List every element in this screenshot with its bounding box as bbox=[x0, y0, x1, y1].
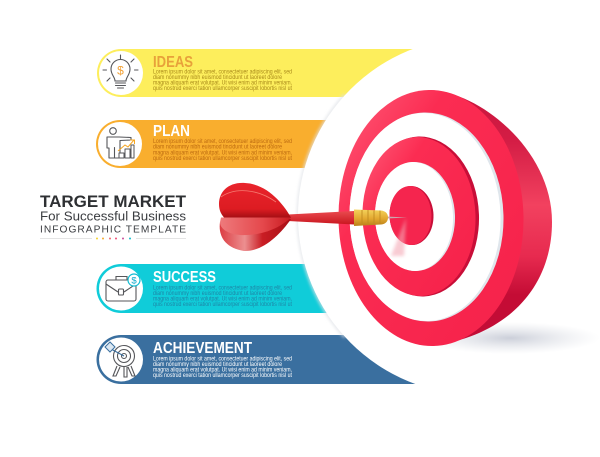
icon: briefcase: $ bbox=[131, 276, 137, 286]
barrel bbox=[354, 210, 388, 226]
icon: light bulb bbox=[99, 51, 143, 95]
plan text: diam nonummy nibh euismod tincidunt ut laoreet dolore bbox=[153, 145, 283, 151]
achievement text: quis nostrud exerci tation ullamcorper suscipit lobortis nisl ut bbox=[153, 373, 292, 379]
success text bbox=[153, 285, 292, 308]
panel: success bbox=[96, 264, 345, 313]
inner white ring bbox=[373, 161, 457, 272]
lower flight front bbox=[220, 218, 291, 235]
plan heading: PLAN bbox=[153, 123, 190, 140]
success band bbox=[96, 264, 345, 313]
title block bbox=[40, 192, 187, 240]
achievement heading: ACHIEVEMENT bbox=[153, 340, 252, 357]
ideas band bbox=[97, 49, 416, 97]
bullseye bbox=[388, 185, 435, 246]
outer white ring bbox=[347, 111, 506, 323]
success heading: SUCCESS bbox=[153, 269, 216, 286]
lower flight back bbox=[220, 219, 291, 251]
ideas text: quis nostrud exerci tation ullamcorper suscipit lobortis nisl ut bbox=[153, 86, 292, 92]
upper flight bbox=[219, 183, 291, 218]
plan text: Lorem ipsum dolor sit amet, consectetuer adipiscing elit, sed bbox=[153, 139, 292, 145]
tagline: INFOGRAPHIC TEMPLATE bbox=[40, 224, 186, 236]
needle bbox=[386, 216, 407, 218]
achievement text: diam nonummy nibh euismod tincidunt ut laoreet dolore bbox=[153, 362, 283, 368]
icon: briefcase bbox=[99, 266, 143, 310]
success text: Lorem ipsum dolor sit amet, consectetuer adipiscing elit, sed bbox=[153, 285, 292, 291]
ideas text: magna aliquam erat volutpat. Ut wisi enim ad minim veniam, bbox=[153, 80, 292, 86]
success text: magna aliquam erat volutpat. Ut wisi enim ad minim veniam, bbox=[153, 296, 292, 302]
colored dots bbox=[96, 238, 131, 240]
shaft bbox=[288, 211, 354, 224]
dart bbox=[219, 183, 407, 251]
white arc behind target bbox=[298, 37, 600, 395]
board face bbox=[336, 88, 526, 348]
achievement text bbox=[153, 356, 292, 379]
dart shadow on board bbox=[391, 218, 406, 256]
icon: target with arrow bbox=[99, 338, 143, 382]
achievement text: magna aliquam erat volutpat. Ut wisi enim ad minim veniam, bbox=[153, 367, 292, 373]
plan text: magna aliquam erat volutpat. Ut wisi enim ad minim veniam, bbox=[153, 150, 292, 156]
panel: ideas bbox=[97, 49, 416, 97]
middle red ring bbox=[360, 135, 482, 298]
title: TARGET MARKET bbox=[40, 192, 187, 211]
success text: diam nonummy nibh euismod tincidunt ut laoreet dolore bbox=[153, 291, 283, 297]
subtitle: For Successful Business bbox=[40, 210, 186, 224]
plan band bbox=[96, 120, 345, 168]
panel: plan bbox=[96, 120, 345, 168]
ideas text: Lorem ipsum dolor sit amet, consectetuer adipiscing elit, sed bbox=[153, 70, 292, 76]
achievement text: Lorem ipsum dolor sit amet, consectetuer adipiscing elit, sed bbox=[153, 356, 292, 362]
success text: quis nostrud exerci tation ullamcorper suscipit lobortis nisl ut bbox=[153, 302, 292, 308]
ideas text bbox=[153, 70, 292, 92]
achievement band bbox=[96, 335, 416, 384]
target board bbox=[336, 88, 600, 354]
ideas text: diam nonummy nibh euismod tincidunt ut laoreet dolore bbox=[153, 75, 283, 81]
plan text bbox=[153, 139, 292, 162]
icon: light bulb: $ bbox=[117, 64, 124, 78]
panel: achievement bbox=[96, 335, 416, 384]
plan text: quis nostrud exerci tation ullamcorper suscipit lobortis nisl ut bbox=[153, 156, 292, 162]
board side bbox=[430, 90, 552, 346]
ground shadow bbox=[420, 322, 600, 354]
icon: presenter with growth chart bbox=[98, 122, 142, 166]
ideas heading: IDEAS bbox=[153, 54, 193, 71]
